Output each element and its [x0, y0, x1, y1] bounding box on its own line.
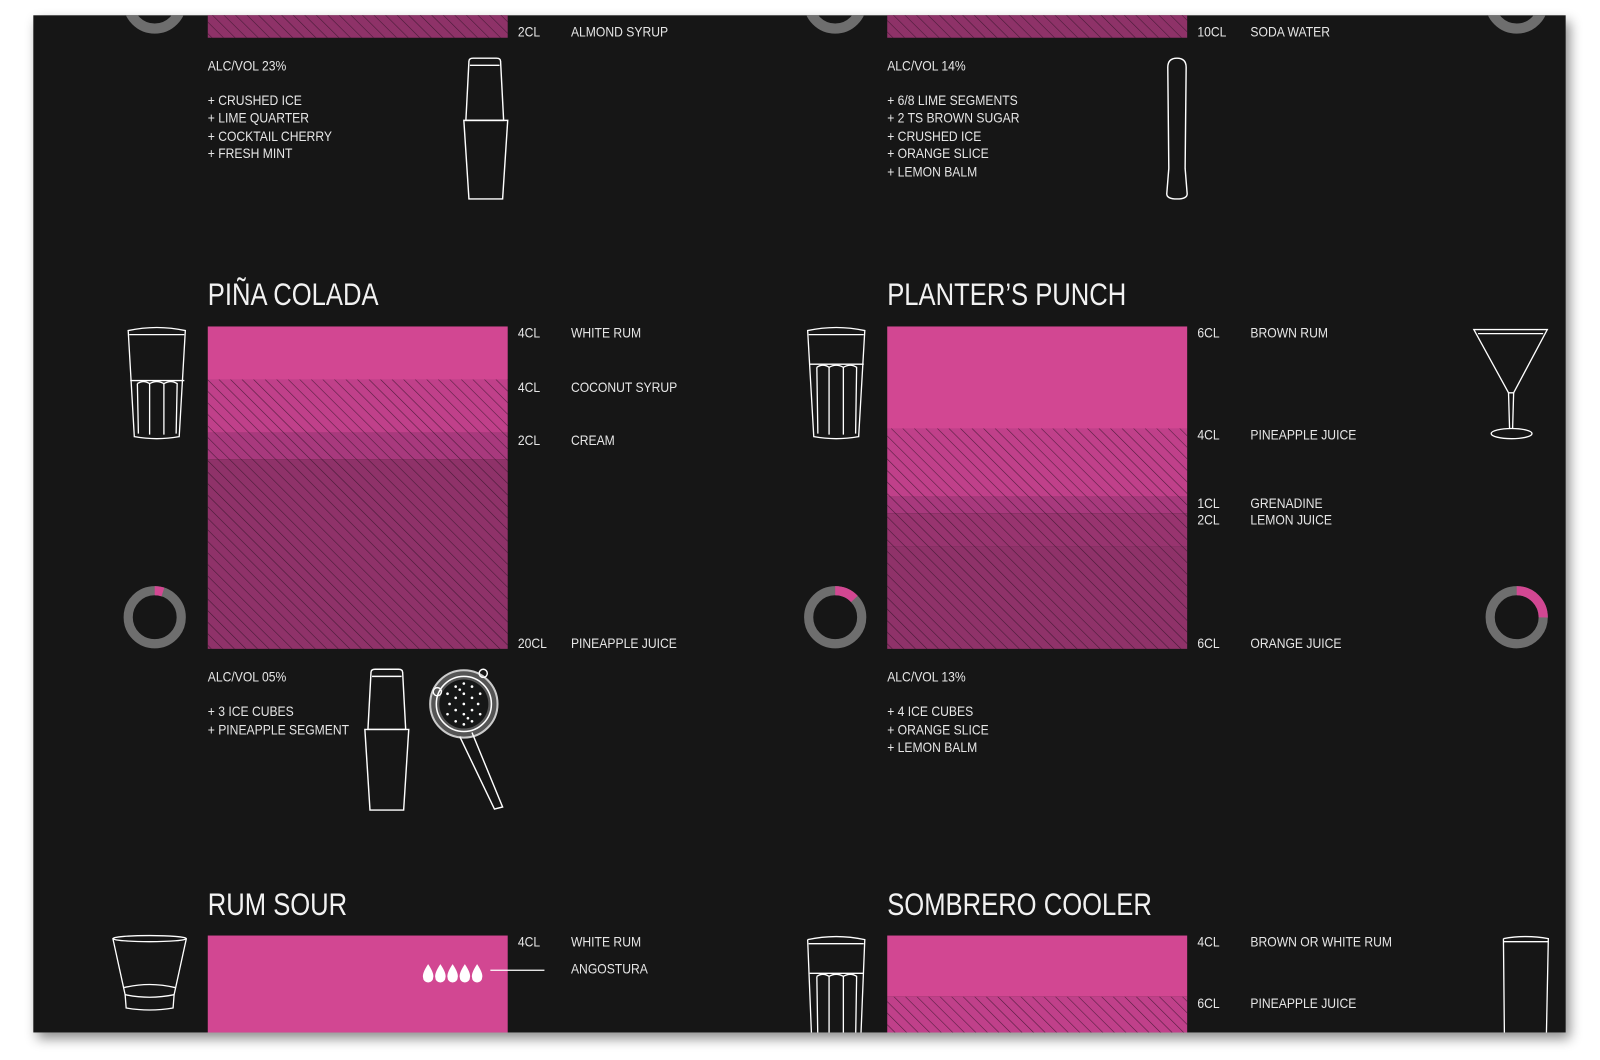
panel: top right recipe remnant: SODA WATER — [1250, 24, 1330, 40]
icon: shaker — [464, 58, 508, 199]
icon: collins glass — [1503, 937, 1548, 1041]
panel: top left recipe remnant: 2CL — [518, 24, 540, 40]
icon: shaker — [365, 669, 409, 810]
panel: rum sour — [113, 888, 648, 1038]
panel: planter's punch: BROWN RUM — [1250, 325, 1328, 341]
panel: top left recipe remnant: ALMOND SYRUP — [571, 24, 668, 40]
recipe notes — [887, 669, 989, 755]
panel: sombrero cooler: BROWN OR WHITE RUM — [1250, 934, 1392, 950]
panel: top right recipe remnant: ALC/VOL 14% — [887, 57, 966, 74]
donut: 5% — [128, 591, 181, 644]
panel: sombrero cooler — [808, 888, 1548, 1041]
panel: rum sour: ANGOSTURA — [571, 960, 648, 977]
panel: pina colada: WHITE RUM — [571, 325, 641, 341]
panel: planter's punch — [808, 278, 1547, 755]
panel: pina colada: PINEAPPLE JUICE — [571, 635, 677, 651]
panel: pina colada: 2CL — [518, 432, 540, 448]
recipe notes: + 3 ICE CUBES — [208, 703, 294, 719]
panel: planter's punch: 4CL — [1197, 427, 1220, 443]
icon: drops — [423, 964, 482, 982]
stacked bar — [887, 326, 1187, 649]
panel: pina colada: COCONUT SYRUP — [571, 379, 677, 395]
donut: 13% — [809, 591, 862, 644]
panel: top right recipe remnant: + 6/8 LIME SEGMENTS — [887, 92, 1018, 108]
recipe notes: + LEMON BALM — [887, 739, 977, 755]
recipe notes — [208, 669, 349, 738]
icon: martini glass — [1474, 330, 1547, 439]
panel: top left recipe remnant: + FRESH MINT — [208, 145, 292, 161]
panel: planter's punch: PINEAPPLE JUICE — [1250, 427, 1356, 443]
panel: sombrero cooler: 6CL — [1197, 995, 1220, 1011]
panel: rum sour: WHITE RUM — [571, 934, 641, 950]
panel: rum sour: 4CL — [518, 934, 540, 950]
icon: highball glass — [128, 327, 185, 439]
panel: top left recipe remnant — [208, 10, 668, 199]
stacked bar — [208, 326, 508, 649]
panel: planter's punch: LEMON JUICE — [1250, 511, 1332, 528]
panel: sombrero cooler: PINEAPPLE JUICE — [1250, 995, 1356, 1011]
panel: planter's punch: 1CL — [1197, 495, 1220, 511]
panel: top right recipe remnant: 10CL — [1197, 24, 1226, 40]
top partial donuts — [126, 15, 1546, 34]
panel: planter's punch: 6CL — [1197, 325, 1220, 341]
bar — [208, 936, 508, 1038]
panel: pina colada: 4CL — [518, 325, 540, 341]
panel: top left recipe remnant: ALC/VOL 23% — [208, 57, 286, 74]
panel: top right recipe remnant: + 2 TS BROWN SUGAR — [887, 109, 1020, 126]
title: PIÑA COLADA — [208, 275, 379, 313]
panel: planter's punch: 6CL — [1197, 635, 1220, 651]
title: PLANTER’S PUNCH — [887, 278, 1126, 313]
icon: highball glass — [808, 327, 865, 439]
bar — [887, 936, 1187, 1038]
recipe notes: + ORANGE SLICE — [887, 722, 989, 738]
panel: top left recipe remnant: + CRUSHED ICE — [208, 92, 302, 108]
panel: top left recipe remnant: + LIME QUARTER — [208, 109, 309, 126]
panel: pina colada: 4CL — [518, 379, 540, 395]
panel: sombrero cooler: 4CL — [1197, 934, 1220, 950]
icon: highball glass — [808, 937, 865, 1041]
panel: pina colada — [128, 275, 677, 810]
panel: planter's punch: 2CL — [1197, 511, 1220, 528]
recipe notes: + 4 ICE CUBES — [887, 703, 973, 719]
panel: top right recipe remnant: + CRUSHED ICE — [887, 128, 981, 144]
panel: top right recipe remnant: + ORANGE SLICE — [887, 145, 989, 161]
recipe notes: + PINEAPPLE SEGMENT — [208, 722, 349, 738]
panel: pina colada: 20CL — [518, 635, 547, 651]
panel: planter's punch: GRENADINE — [1250, 495, 1323, 511]
title: RUM SOUR — [208, 888, 347, 923]
panel: planter's punch: ORANGE JUICE — [1250, 635, 1342, 651]
recipe notes: ALC/VOL 13% — [887, 669, 966, 685]
panel: top right recipe remnant: + LEMON BALM — [887, 164, 977, 180]
icon: strainer — [430, 669, 503, 809]
icon: rocks glass — [113, 936, 186, 1010]
title: SOMBRERO COOLER — [887, 888, 1152, 923]
recipe notes: ALC/VOL 05% — [208, 669, 286, 685]
panel: top left recipe remnant: + COCKTAIL CHERRY — [208, 128, 332, 144]
panel: top right recipe remnant — [887, 10, 1330, 199]
panel: pina colada: CREAM — [571, 432, 615, 448]
donut: right — [1490, 591, 1543, 644]
icon: muddler — [1167, 58, 1187, 199]
